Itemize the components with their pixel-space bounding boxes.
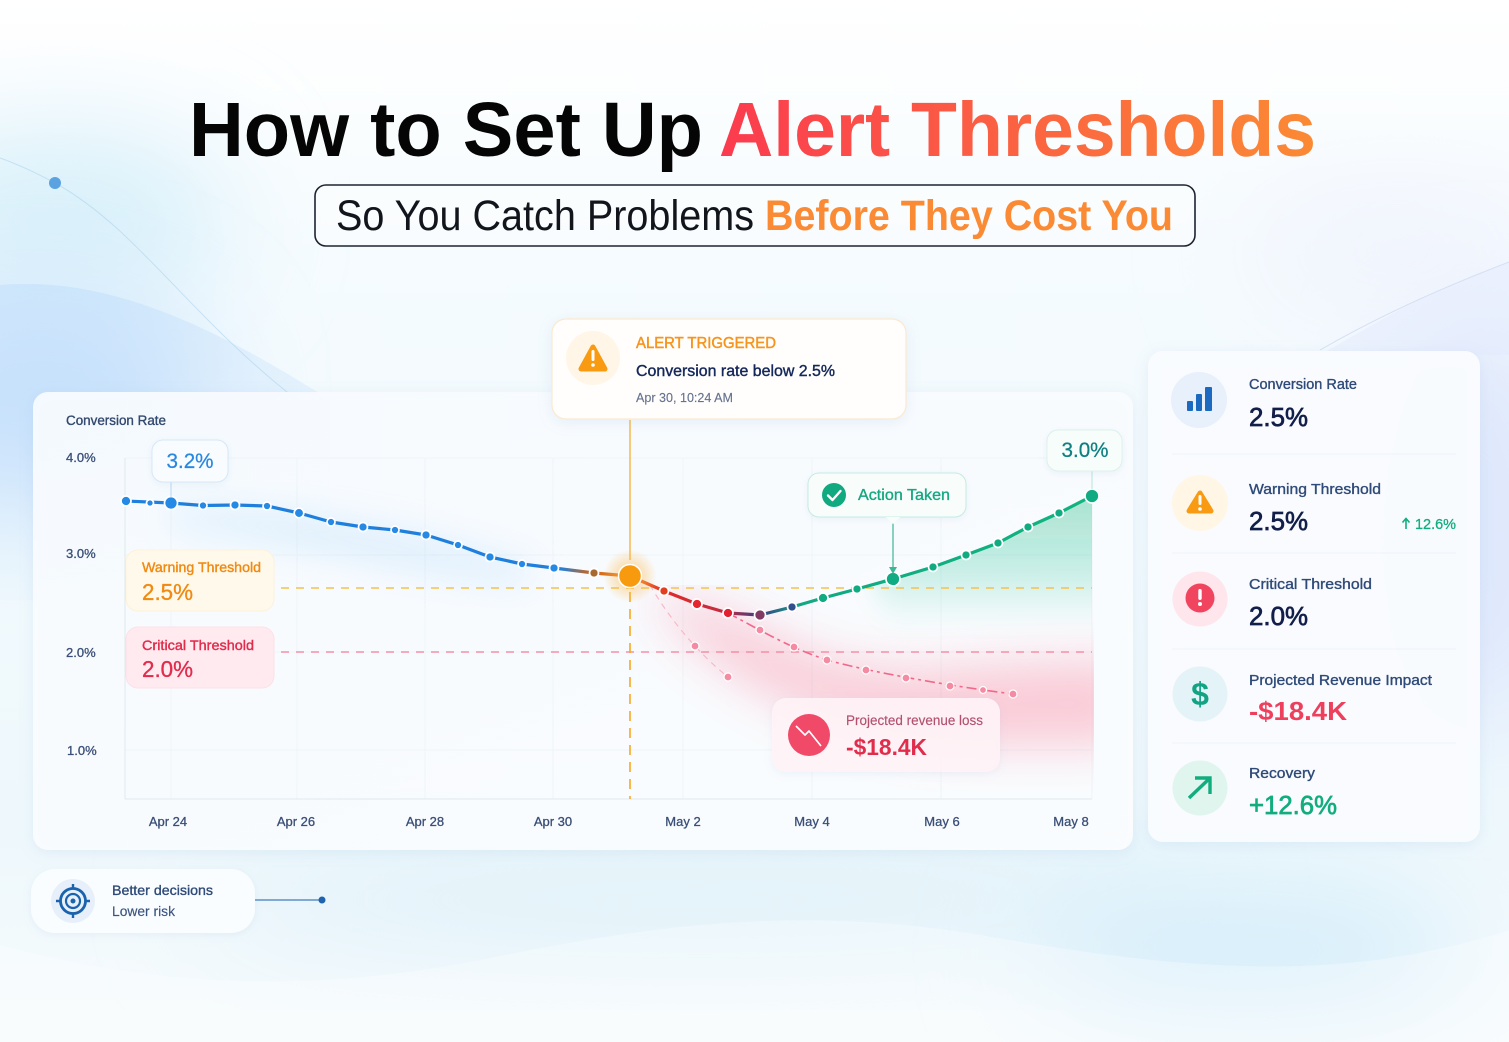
warning threshold line xyxy=(281,587,1092,589)
card: critical threshold: Critical Threshold xyxy=(142,637,254,653)
callout: action taken xyxy=(808,473,966,574)
callout: alert triggered xyxy=(552,319,906,419)
icon: alert xyxy=(1186,584,1214,612)
alert vertical marker xyxy=(629,420,631,799)
badge: better decisions xyxy=(31,869,326,933)
callout: 3.0%: 3.0% xyxy=(1062,439,1108,462)
icon: target xyxy=(51,879,95,923)
metric: projected revenue impact xyxy=(1172,666,1432,726)
x axis labels: May 8 xyxy=(1053,814,1089,829)
critical threshold line xyxy=(281,651,1092,653)
y axis labels: 1.0% xyxy=(67,743,97,758)
metric: conversion rate xyxy=(1171,372,1357,432)
icon: dollar: $ xyxy=(1191,676,1209,712)
panel: metrics sidebar xyxy=(1148,351,1480,842)
trend indicator: 12.6% xyxy=(1415,517,1456,533)
icon: arrow up right xyxy=(1189,778,1210,798)
callout: projected revenue loss: Projected revenue loss xyxy=(846,713,983,728)
callout: alert triggered: Conversion rate below 2.5% xyxy=(636,363,835,380)
dividers xyxy=(1172,454,1456,743)
metric: critical threshold xyxy=(1172,572,1372,631)
metric: recovery: +12.6% xyxy=(1249,790,1337,820)
panel: conversion rate chart xyxy=(33,392,1160,850)
main conversion line xyxy=(126,496,1092,615)
card: critical threshold: 2.0% xyxy=(142,656,193,682)
metric: conversion rate: Conversion Rate xyxy=(1249,377,1357,393)
metric: warning threshold: 2.5% xyxy=(1249,506,1308,536)
badge: better decisions: Better decisions xyxy=(112,882,213,898)
x axis labels: May 4 xyxy=(794,814,830,829)
metric: projected revenue impact: -$18.4K xyxy=(1249,696,1347,726)
x axis labels: Apr 26 xyxy=(277,814,315,829)
metric: recovery: Recovery xyxy=(1249,766,1316,782)
subtitle box xyxy=(315,185,1195,246)
card: warning threshold: Warning Threshold xyxy=(142,559,261,575)
callout: alert triggered: ALERT TRIGGERED xyxy=(636,335,776,352)
metric: warning threshold: Warning Threshold xyxy=(1249,482,1381,498)
projected decline line xyxy=(650,585,1017,698)
x axis labels: May 2 xyxy=(665,814,701,829)
y axis labels: 3.0% xyxy=(66,546,96,561)
icon: warning triangle xyxy=(566,331,620,385)
metric: conversion rate: 2.5% xyxy=(1249,402,1308,432)
title: Alert Thresholds xyxy=(719,87,1316,173)
metric: projected revenue impact: Projected Revenue Impact xyxy=(1249,673,1432,689)
card: critical threshold xyxy=(126,627,274,688)
recovery area xyxy=(868,501,1092,618)
title: How to Set Up xyxy=(189,87,703,173)
chart heading: Conversion Rate xyxy=(66,413,166,428)
data points xyxy=(121,489,1099,620)
metric: critical threshold: 2.0% xyxy=(1249,601,1308,631)
y axis labels xyxy=(66,450,97,758)
icon: bars xyxy=(1187,387,1212,411)
y axis labels: 2.0% xyxy=(66,645,96,660)
title xyxy=(189,87,1316,173)
callout: action taken: Action Taken xyxy=(858,487,950,504)
callout: projected revenue loss xyxy=(772,698,1000,772)
x axis labels xyxy=(149,814,1089,829)
x axis labels: Apr 24 xyxy=(149,814,187,829)
x axis labels: May 6 xyxy=(924,814,960,829)
card: warning threshold: 2.5% xyxy=(142,579,193,605)
metric: critical threshold: Critical Threshold xyxy=(1249,577,1372,593)
callout: projected revenue loss: -$18.4K xyxy=(846,734,927,760)
callout: 3.0% xyxy=(1047,430,1122,489)
icon: falling trend xyxy=(788,714,830,756)
callout: alert triggered: Apr 30, 10:24 AM xyxy=(636,390,733,405)
alert point xyxy=(603,549,657,603)
metric: recovery xyxy=(1172,760,1337,820)
callout: 3.2%: 3.2% xyxy=(166,450,214,473)
icon: warning xyxy=(1189,493,1211,511)
y axis labels: 4.0% xyxy=(66,450,96,465)
icon: check xyxy=(822,483,846,507)
x axis labels: Apr 30 xyxy=(534,814,572,829)
projected loss area xyxy=(645,590,1130,745)
x axis labels: Apr 28 xyxy=(406,814,444,829)
metric: warning threshold xyxy=(1172,475,1456,536)
card: warning threshold xyxy=(126,550,274,611)
subtitle box: Before They Cost You xyxy=(765,192,1173,240)
subtitle box: So You Catch Problems xyxy=(336,192,754,240)
grid lines xyxy=(125,458,1092,799)
callout: 3.2% xyxy=(152,440,228,497)
badge: better decisions: Lower risk xyxy=(112,904,175,919)
blue glow under line xyxy=(170,508,540,585)
